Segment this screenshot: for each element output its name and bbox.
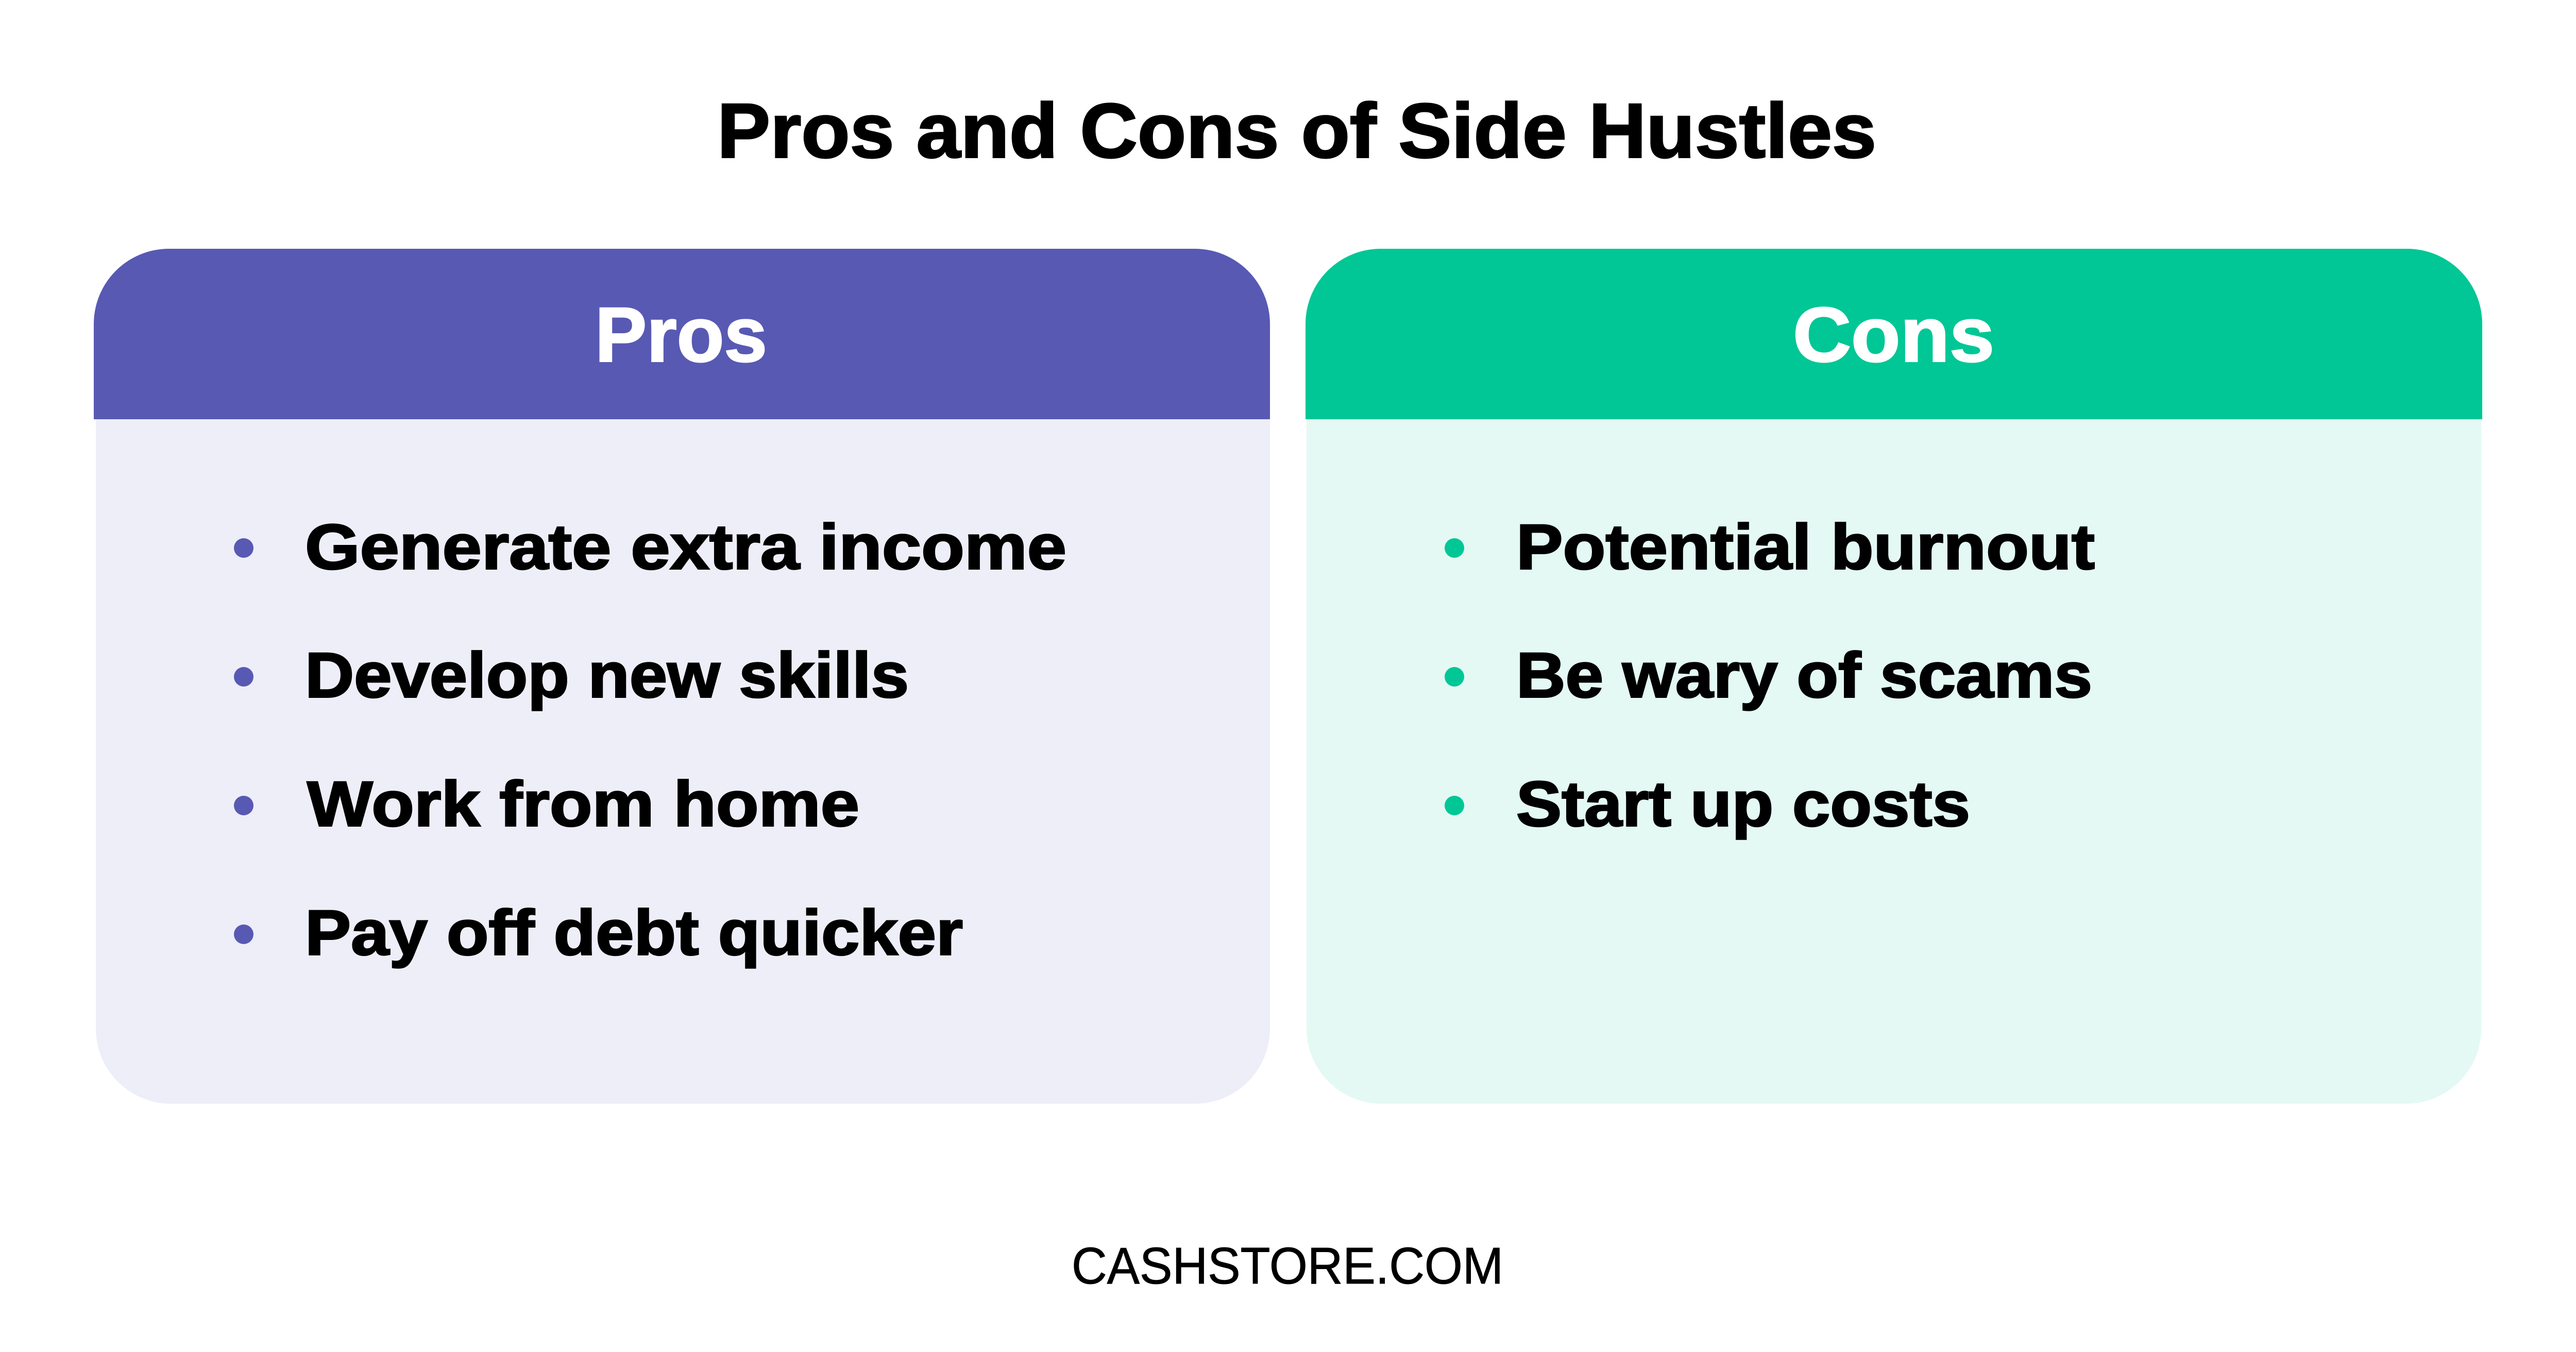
pros panel body xyxy=(96,419,1270,1104)
cons heading: Cons xyxy=(1793,292,1994,378)
panel: pros xyxy=(94,249,1270,1104)
pros item 4: Pay off debt quicker xyxy=(305,897,963,968)
pros heading: Pros xyxy=(595,292,767,378)
cons item 2: Be wary of scams xyxy=(1516,640,2092,711)
cons header bar xyxy=(1306,249,2482,419)
cons panel body xyxy=(1307,419,2481,1104)
pros item 3: Work from home xyxy=(307,768,859,840)
pros item 1: Generate extra income xyxy=(305,512,1066,583)
cons item 1: Potential burnout xyxy=(1516,512,2095,583)
title: Pros and Cons of Side Hustles xyxy=(717,88,1876,174)
pros item 2: Develop new skills xyxy=(305,640,909,711)
panel: cons xyxy=(1306,249,2482,1104)
pros header bar xyxy=(94,249,1270,419)
cons item 3: Start up costs xyxy=(1516,768,1970,840)
footer source label: CASHSTORE.COM xyxy=(1072,1237,1503,1295)
